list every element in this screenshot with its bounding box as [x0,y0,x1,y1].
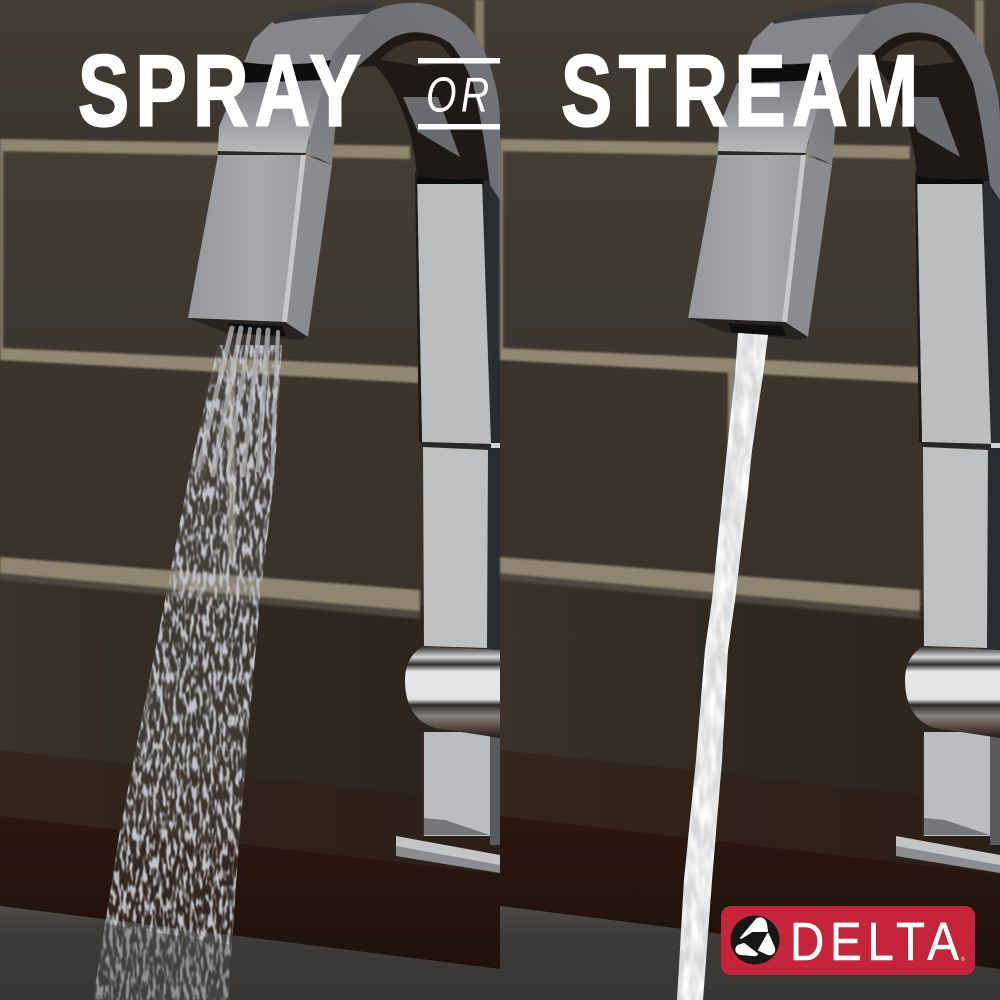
spray water droplets [93,345,282,1000]
registered mark: ® [961,956,965,963]
spray haze [93,345,282,1000]
logo wordmark: DELTA [790,911,959,972]
icon: Delta triangle mark [730,916,780,964]
spray droplets over sink [93,922,232,1000]
Delta logo [721,906,975,975]
left panel: spray faucet scene [0,0,500,1000]
spray water upper jets [198,328,278,475]
title: STREAM: STREAM [561,35,918,148]
title: OR with rules: OR [426,68,489,123]
title: SPRAY: SPRAY [78,35,361,148]
solid water stream [677,333,768,1000]
right panel: stream faucet scene [500,0,1000,1000]
title: OR with rules [418,58,500,130]
